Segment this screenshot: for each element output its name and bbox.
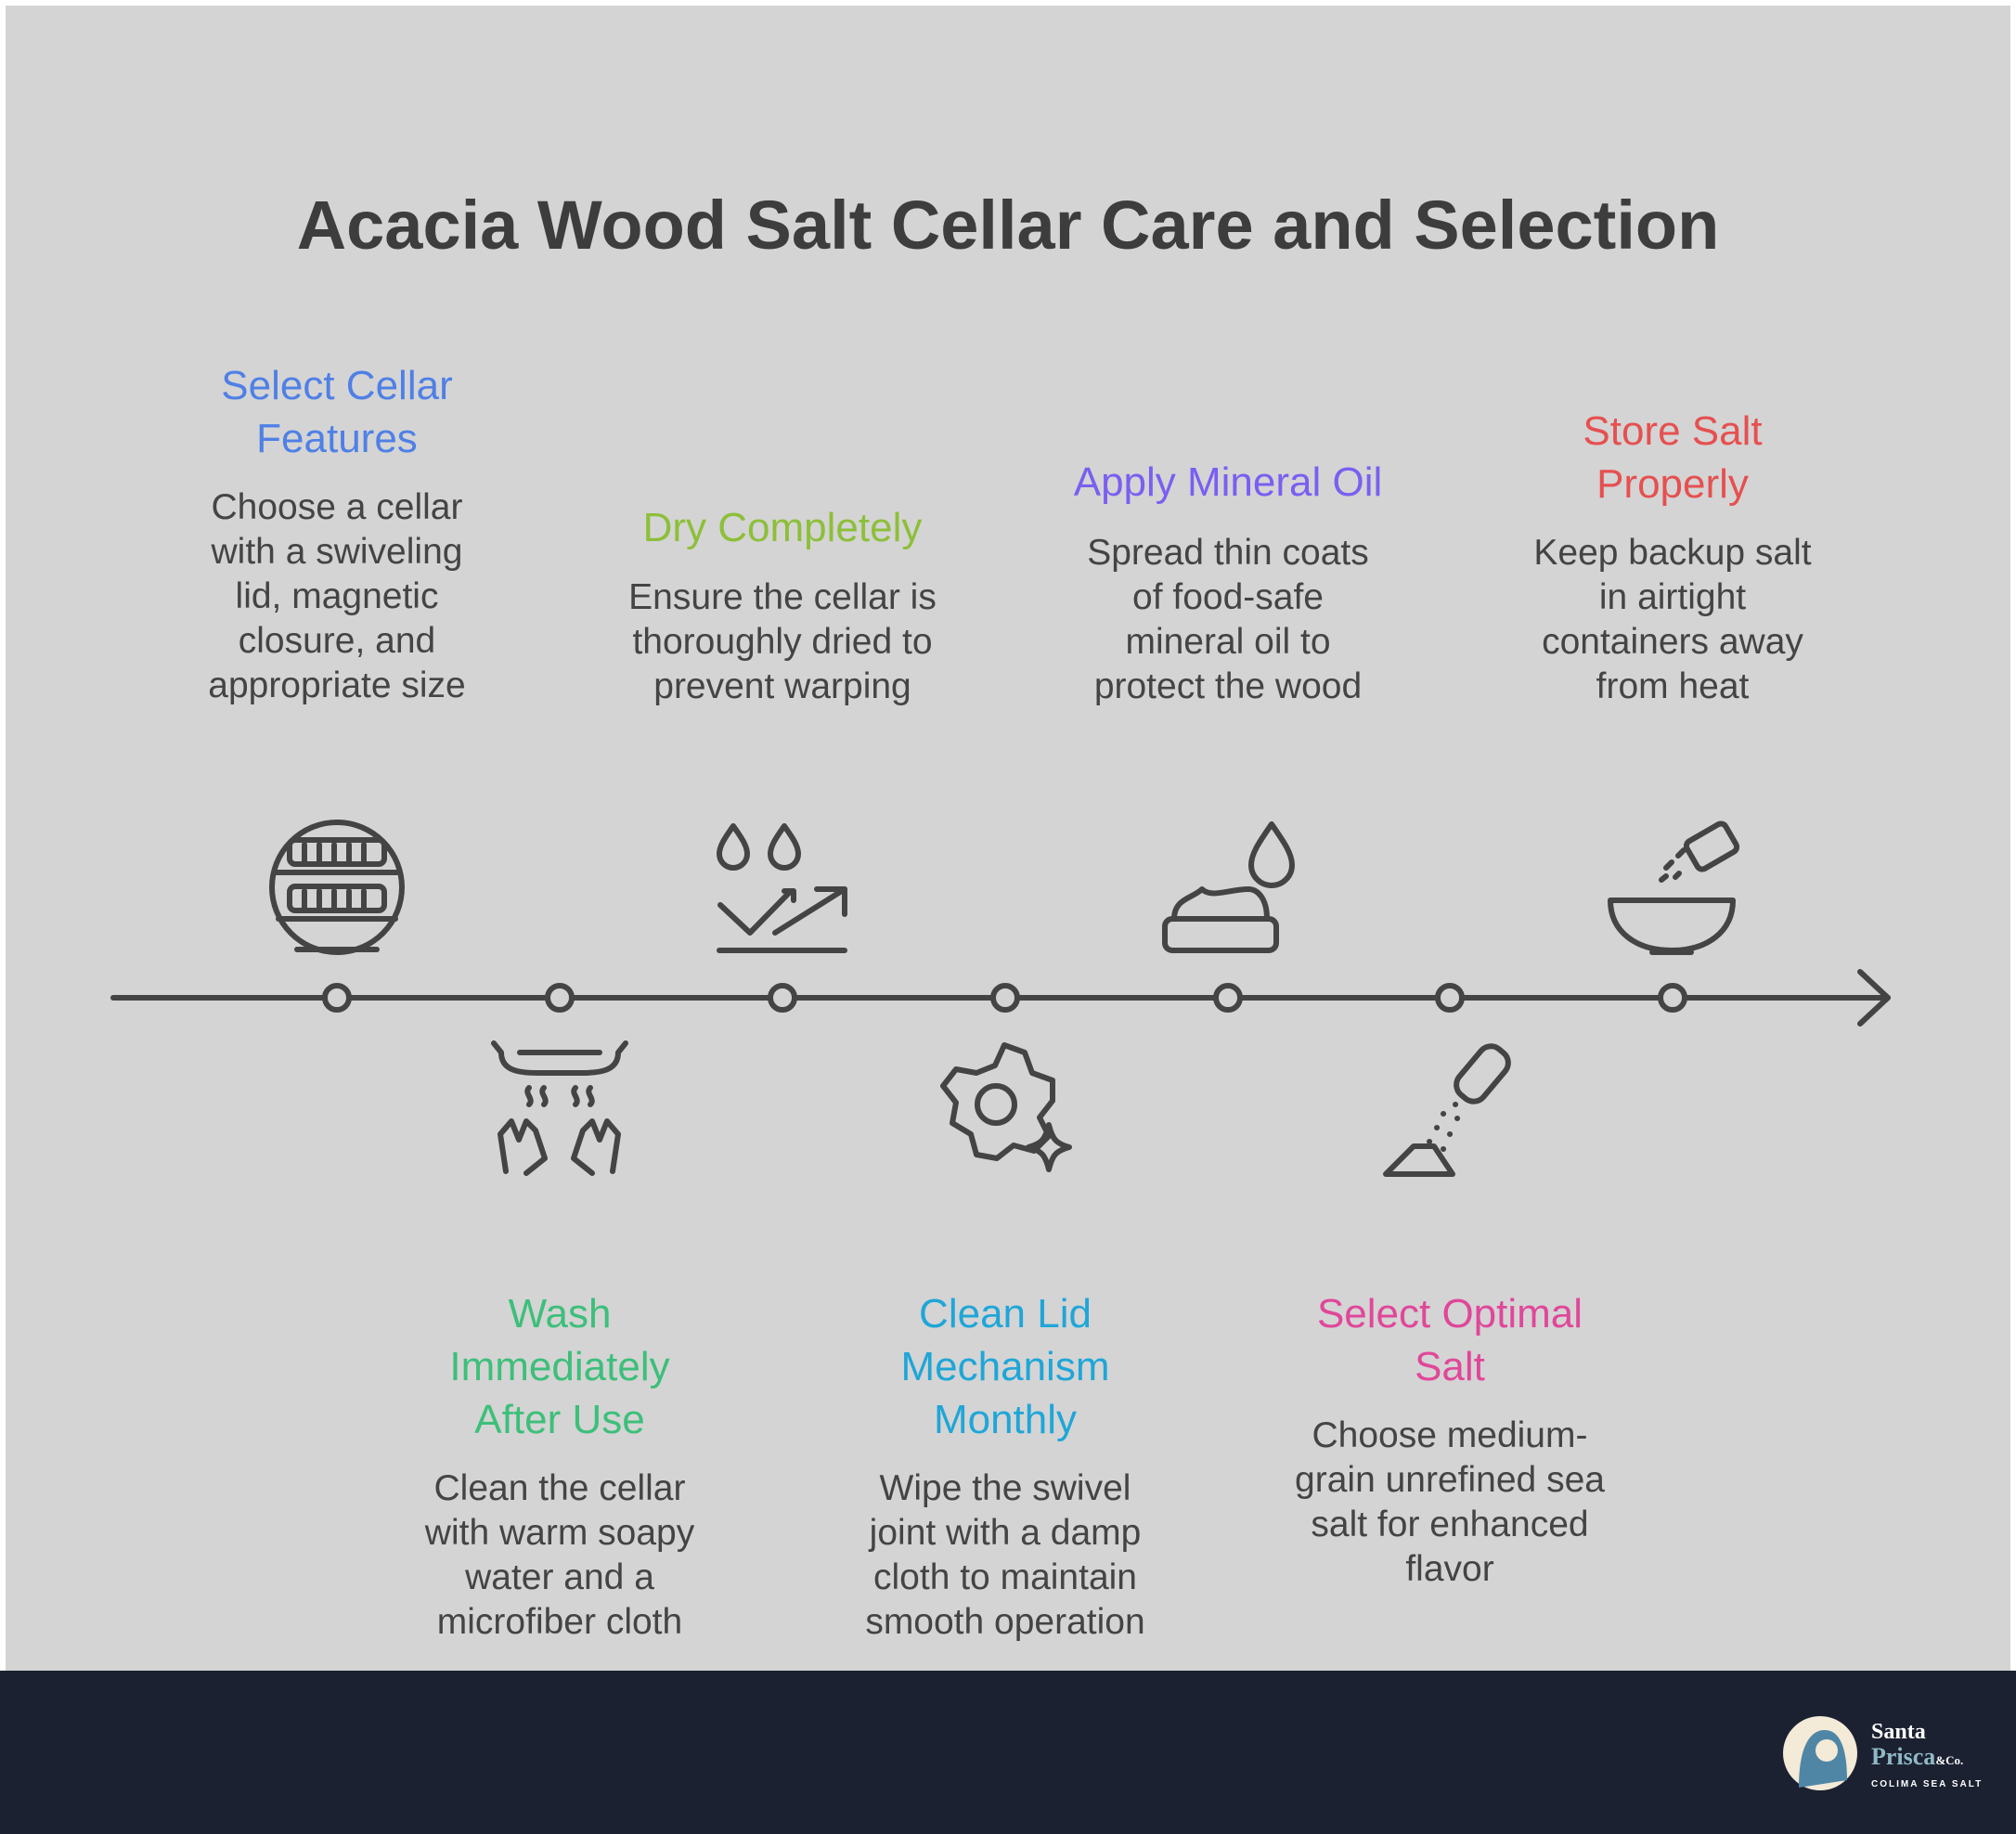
step 6 text: grain unrefined sea [1295,1460,1605,1500]
step 2 text: water and a [465,1557,654,1597]
step 3 text: thoroughly dried to [632,622,933,662]
step 2 text [425,1468,694,1642]
step 6 text: flavor [1405,1549,1494,1589]
step 6 heading [1317,1291,1583,1389]
step 7 heading [1583,408,1763,507]
step 7 text: Keep backup salt [1533,533,1812,573]
step 5 heading: Apply Mineral Oil [1074,459,1382,505]
step 1 heading: Select Cellar [221,363,453,408]
icon: gear with sparkle [943,1045,1069,1169]
step 5 text: of food-safe [1132,577,1324,617]
step 2 heading [449,1291,670,1442]
step 4 heading: Monthly [934,1397,1077,1442]
icon: drops and arrows [719,826,845,950]
step 6 text [1295,1415,1605,1589]
step 1 text: closure, and [239,621,435,661]
step 2 heading: Immediately [449,1344,670,1389]
step 6 text: Choose medium- [1312,1415,1587,1455]
step 2 text: Clean the cellar [434,1468,685,1508]
step 7 text: containers away [1542,622,1803,662]
step 7 heading: Properly [1596,461,1749,507]
step 1 text: with a swiveling [212,532,462,572]
step 5 text: protect the wood [1094,666,1362,706]
step 7 text [1533,533,1812,706]
icon: washing hands [494,1043,626,1173]
step 3 text: prevent warping [653,666,911,706]
step 3 text [628,577,937,706]
step 3 text: Ensure the cellar is [628,577,937,617]
logo text [1871,1720,1983,1789]
step 1 heading: Features [256,416,418,461]
logo emblem [1783,1716,1857,1790]
step 5 text: Spread thin coats [1087,533,1369,573]
icon: salt cellar [272,822,402,952]
timeline arrow [113,972,1888,1024]
step 4 text: Wipe the swivel [880,1468,1131,1508]
step 2 text: with warm soapy [425,1513,694,1553]
title: Acacia Wood Salt Cellar Care and Selection [297,187,1719,264]
step 6 heading: Select Optimal [1317,1291,1583,1337]
step 1 text: Choose a cellar [212,487,462,527]
step 4 text: smooth operation [865,1602,1145,1642]
step 4 text: cloth to maintain [873,1557,1137,1597]
step 6 heading: Salt [1415,1344,1485,1389]
step 4 heading: Clean Lid [919,1291,1092,1337]
step 2 text: microfiber cloth [437,1602,682,1642]
step 4 text [865,1468,1145,1642]
step 1 text: lid, magnetic [236,576,438,616]
step 2 heading: Wash [509,1291,611,1337]
step 4 heading: Mechanism [901,1344,1109,1389]
step 7 text: in airtight [1599,577,1746,617]
logo text: Prisca&Co. [1871,1743,1963,1770]
logo text: Santa [1871,1720,1926,1744]
step 1 text [208,487,466,705]
step 4 text: joint with a damp [870,1513,1141,1553]
step 7 heading: Store Salt [1583,408,1763,454]
step 4 heading [901,1291,1109,1442]
icon: mineral oil [1165,824,1292,950]
step 2 heading: After Use [474,1397,645,1442]
step 7 text: from heat [1596,666,1749,706]
logo [1783,1716,1983,1790]
icon: bowl with shaker [1610,821,1738,952]
step 1 text: appropriate size [208,665,466,705]
step 1 heading [221,363,453,461]
step 6 text: salt for enhanced [1311,1505,1589,1544]
step 5 text [1087,533,1369,706]
logo text: COLIMA SEA SALT [1871,1779,1983,1789]
step 5 text: mineral oil to [1125,622,1331,662]
step 3 heading: Dry Completely [643,505,922,550]
icon: salt shaker pouring [1386,1041,1514,1174]
